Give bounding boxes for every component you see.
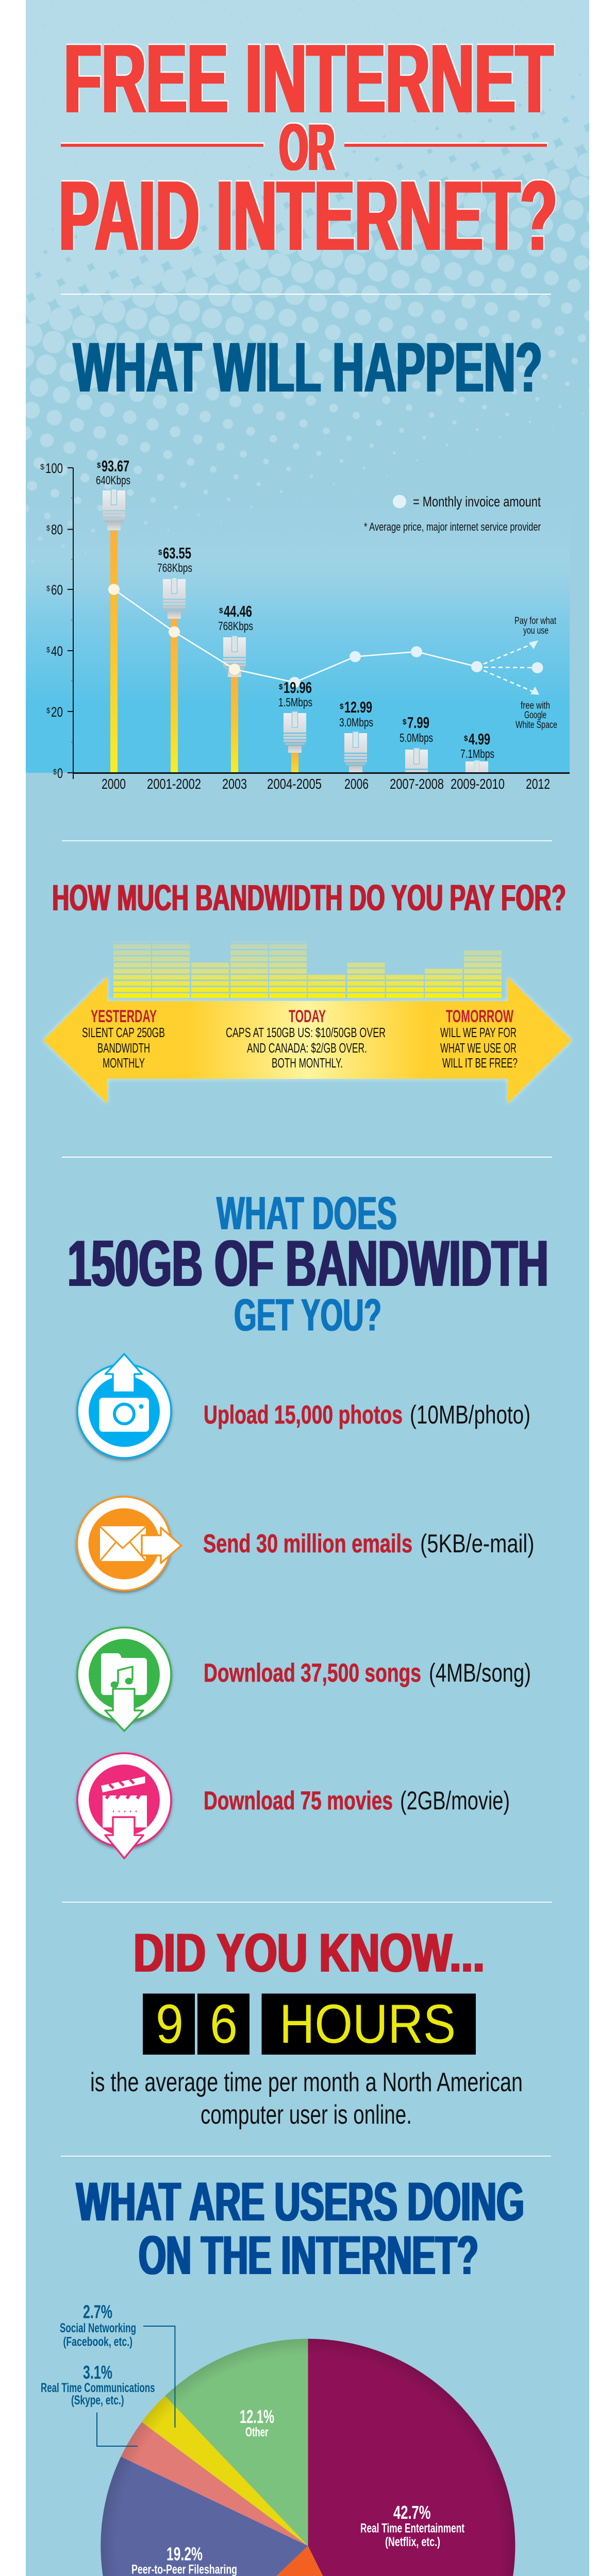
callout: social networking and real time communications: Social Networking [60,2321,136,2335]
heading: what does 150gb of bandwidth get you [68,1188,548,1341]
counter: 96 hours: 9 [156,1993,184,2055]
x axis labels: 2003 [222,776,247,792]
x axis labels: 2001-2002 [147,776,201,792]
x axis labels: 2000 [102,776,126,792]
text: download songs: Download 37,500 songs [204,1658,421,1687]
tomorrow [440,1007,518,1071]
y axis: $ [46,646,51,654]
price labels: 5.0Mbps [400,731,433,744]
x axis labels: 2009-2010 [451,776,505,792]
price labels: 19.96 [284,679,312,697]
x axis labels [102,776,550,792]
y axis: 60 [51,582,63,598]
price labels: $ [464,734,468,743]
today: BOTH MONTHLY. [272,1055,343,1071]
slice label: filesharing: 19.2% [167,2543,203,2565]
price line and dots [108,584,543,694]
today: AND CANADA: $2/GB OVER. [247,1040,367,1056]
price labels: $ [403,718,407,726]
price labels: 12.99 [344,698,372,716]
x axis labels: 2007-2008 [390,776,444,792]
yesterday: YESTERDAY [91,1007,157,1026]
heading: what does 150gb of bandwidth get you: GET YOU? [234,1289,381,1341]
counter: 96 hours: HOURS [279,1993,456,2055]
text: download movies: (2GB/movie) [400,1786,510,1815]
text: average time online [90,2067,523,2130]
yesterday: SILENT CAP 250GB [82,1025,165,1040]
callout: social networking and real time communications [41,2301,175,2446]
price labels: 44.46 [224,602,252,620]
price labels: $ [279,683,283,691]
forecast labels: Google [524,710,546,721]
legend: = Monthly invoice amount [413,494,541,510]
heading: what does 150gb of bandwidth get you: WHAT DOES [217,1188,397,1240]
tomorrow: WILL IT BE FREE? [442,1055,518,1071]
today [226,1007,386,1071]
price labels: 93.67 [102,457,129,475]
slice label: filesharing [131,2543,237,2576]
slice label: real time entertainment: 42.7% [393,2502,431,2523]
y axis [40,461,74,781]
price labels [96,457,494,760]
title [59,24,557,271]
counter: 96 hours: 6 [210,1993,238,2055]
price labels: $ [158,548,162,557]
text: send emails: (5KB/e-mail) [420,1529,534,1558]
x axis labels: 2004-2005 [267,776,322,792]
icon: send emails [77,1497,181,1590]
title: OR [279,111,335,184]
text: download movies: Download 75 movies [204,1786,393,1815]
text: send emails: Send 30 million emails [203,1529,412,1558]
price labels: 1.5Mbps [278,696,312,709]
tomorrow: WILL WE PAY FOR [440,1025,517,1040]
icon: upload photos [77,1354,171,1458]
price labels: $ [97,461,101,470]
slice label: real time entertainment [360,2502,464,2549]
price labels: 4.99 [469,730,490,748]
text: upload photos: Upload 15,000 photos [204,1400,403,1429]
y axis: $ [46,706,51,715]
pie chart [101,2339,515,2576]
forecast labels: Pay for what [514,616,557,626]
y axis: 40 [51,643,63,659]
heading: did you know: DID YOU KNOW... [134,1922,485,1984]
yesterday: BANDWIDTH [97,1040,150,1056]
y axis: 100 [45,461,63,476]
price labels: 63.55 [163,544,191,562]
price labels: 7.1Mbps [460,747,494,760]
forecast labels: free with [521,701,550,711]
y axis: 0 [57,766,63,781]
callout: social networking and real time communications: 2.7% [83,2301,112,2323]
slice label: other [240,2406,274,2439]
forecast labels: White Space [516,720,557,731]
tomorrow: WHAT WE USE OR [440,1040,517,1056]
callout: social networking and real time communications: Real Time Communications [41,2381,155,2395]
slice label: other: 12.1% [240,2406,274,2427]
forecast labels: you use [523,625,548,636]
callout: social networking and real time communications: (Skype, etc.) [71,2393,124,2408]
x axis labels: 2012 [526,776,550,792]
price labels: $ [340,702,344,711]
callout: social networking and real time communications: (Facebook, etc.) [63,2335,132,2349]
price labels: 768Kbps [218,619,253,633]
forecast labels [514,616,557,731]
yesterday [82,1007,165,1071]
icon: download songs [77,1628,171,1731]
price labels: 768Kbps [157,561,192,574]
price labels: 3.0Mbps [339,716,373,729]
legend [364,494,541,533]
text: download songs: (4MB/song) [429,1658,531,1687]
tomorrow: TOMORROW [446,1007,514,1026]
price labels: 7.99 [407,714,429,732]
arrow: yesterday today tomorrow [43,977,572,1104]
yesterday: MONTHLY [103,1055,145,1071]
y axis: $ [46,584,51,593]
legend: * Average price, major internet service provider [364,520,541,533]
equalizer bars [113,941,483,998]
chart: price vs speed over time [26,457,570,792]
text: upload photos: (10MB/photo) [410,1400,530,1429]
counter: 96 hours [143,1993,476,2055]
x axis labels: 2006 [344,776,369,792]
slice label: other: Other [245,2425,269,2439]
icon: download movies [77,1753,171,1858]
heading: what are users doing [76,2171,524,2286]
y axis: 20 [51,704,63,720]
y axis: $ [53,768,57,776]
slice label: real time entertainment: (Netflix, etc.) [385,2535,440,2549]
slice label: real time entertainment: Real Time Entertainment [360,2521,464,2536]
bars and plugs [103,489,488,773]
price labels: 640Kbps [96,473,130,487]
y axis: 80 [51,522,63,537]
price labels: $ [219,606,223,615]
today: CAPS AT 150GB US: $10/50GB OVER [226,1025,386,1040]
today: TODAY [289,1007,326,1026]
y axis: $ [40,463,45,471]
y axis: $ [46,524,51,533]
callout: social networking and real time communications: 3.1% [83,2362,112,2383]
text: average time online: computer user is online. [201,2100,412,2130]
